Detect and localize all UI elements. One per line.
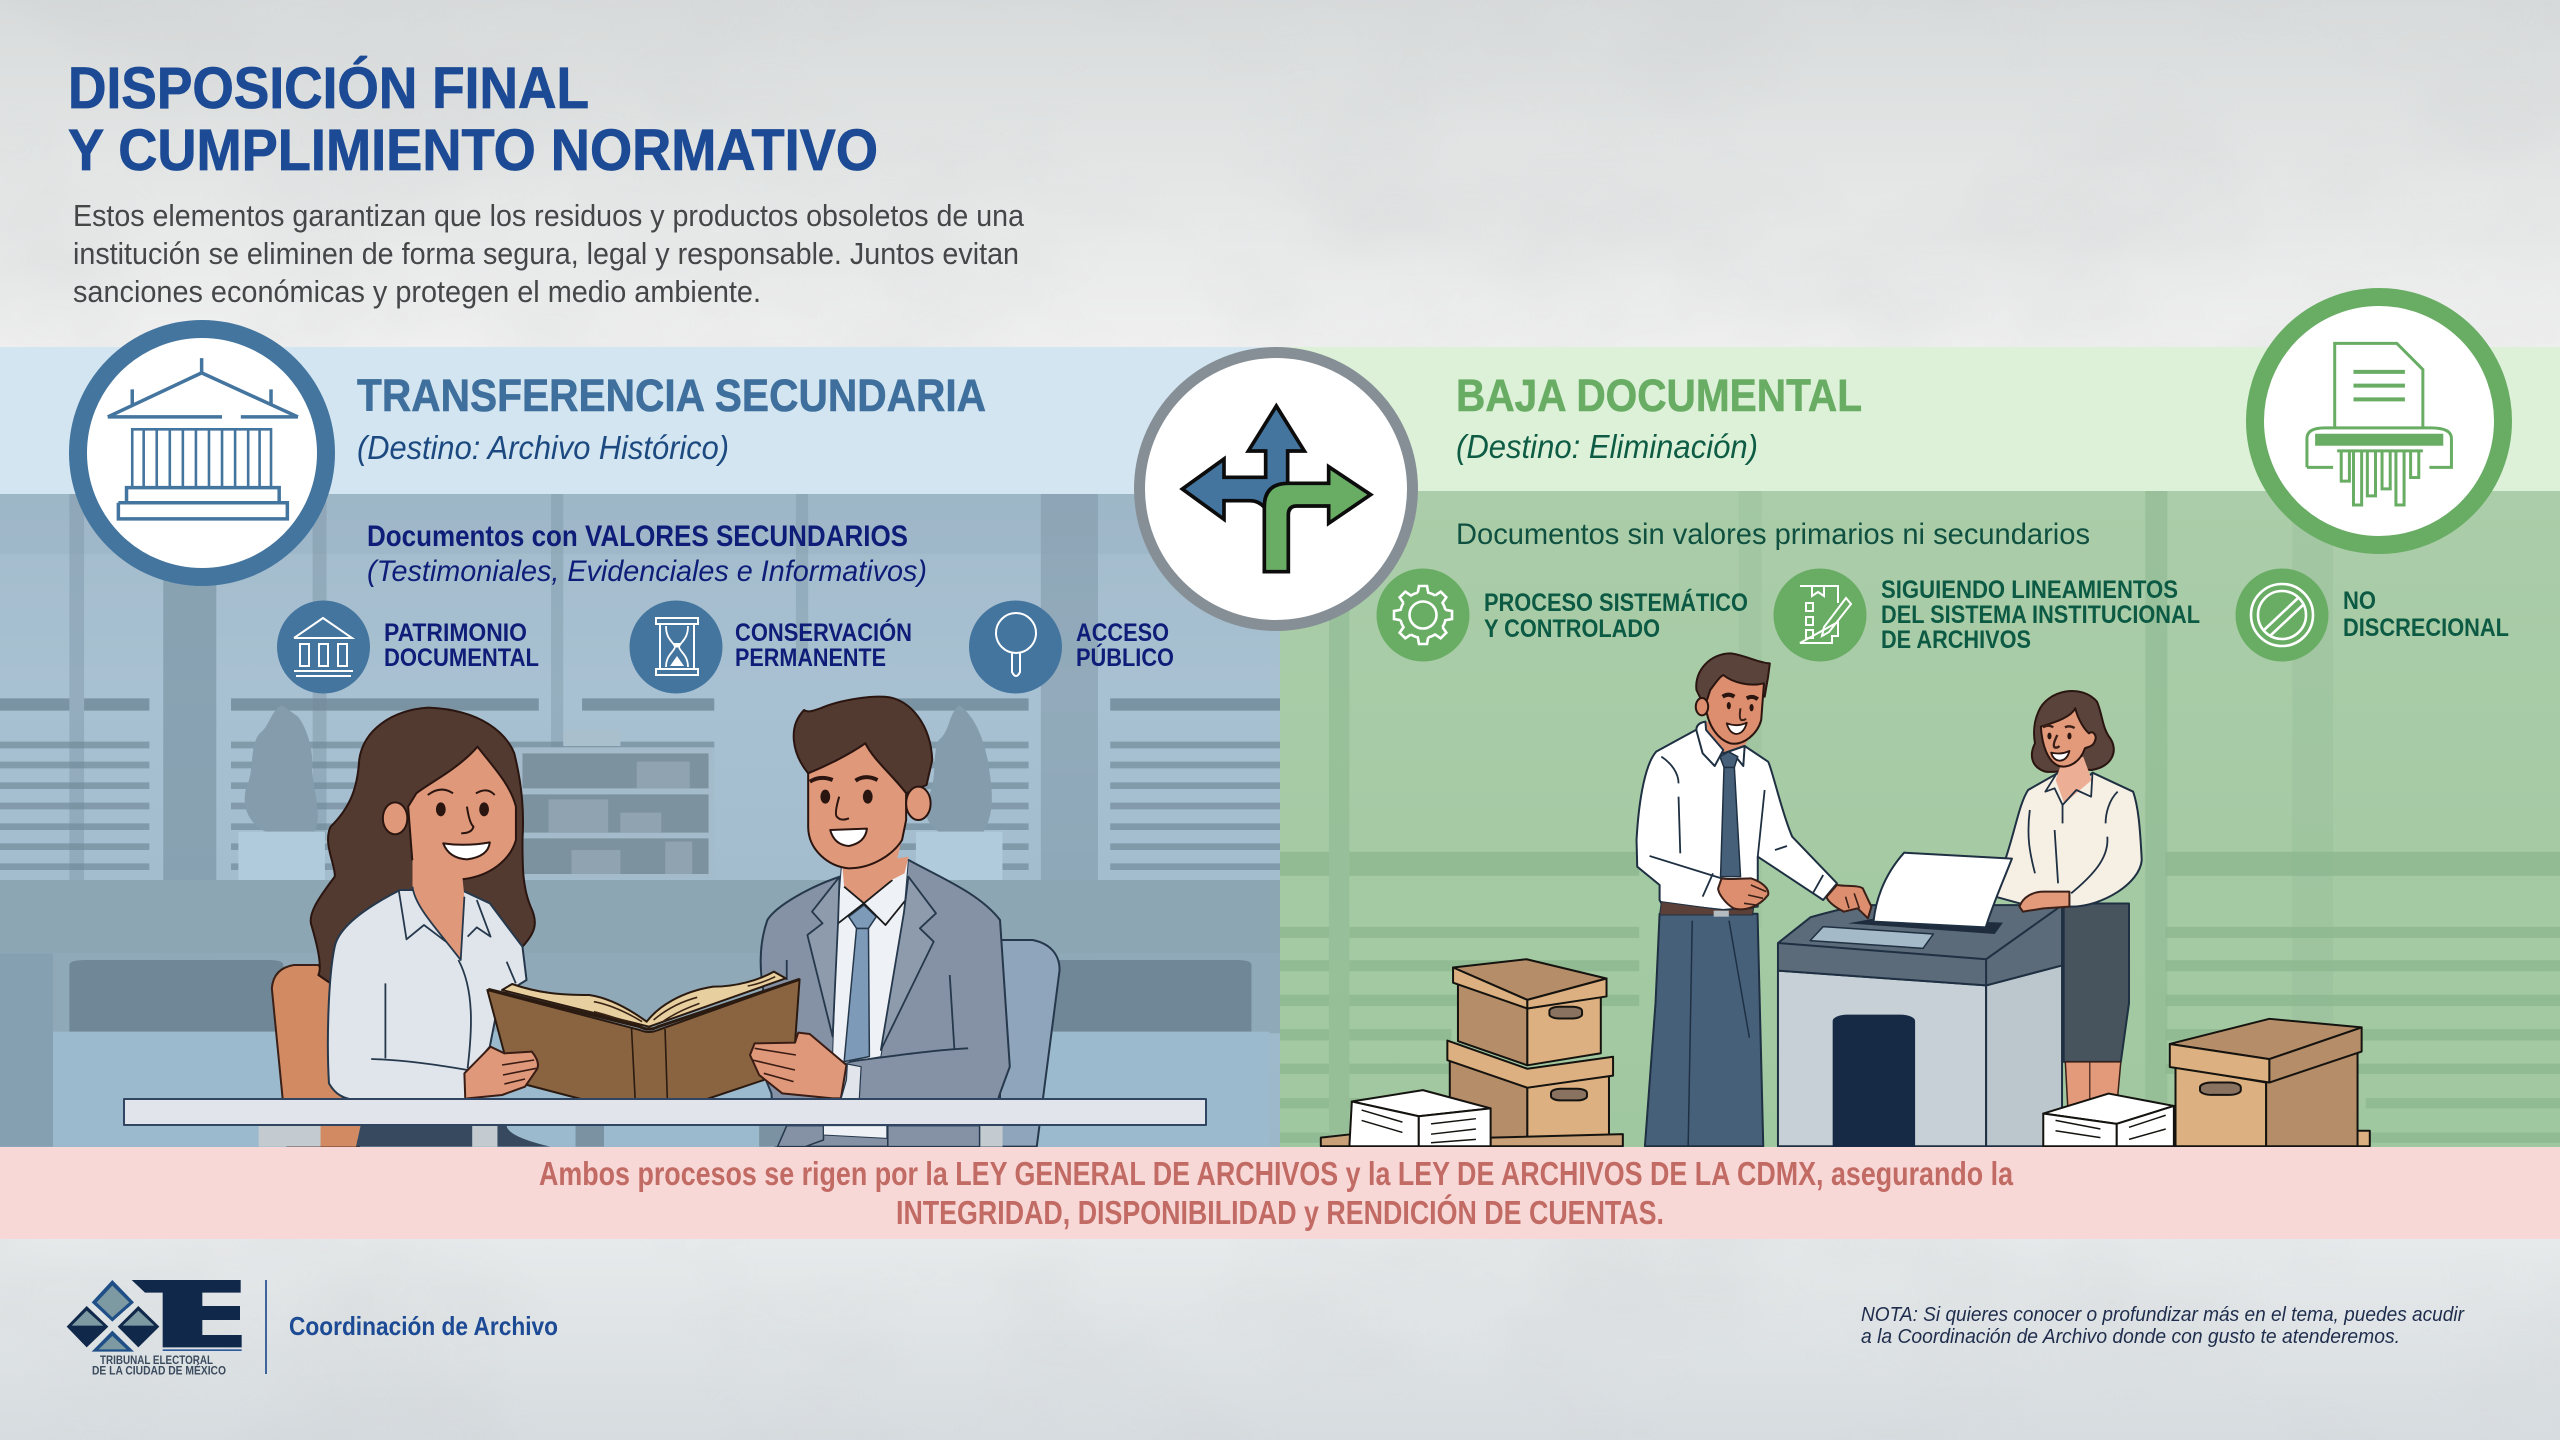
panel: baja documental scene (1280, 487, 2560, 1152)
people reading a book at a table (124, 697, 1206, 1147)
divider and department name: Coordinación de Archivo (289, 1311, 558, 1341)
icon item: lineamientos: SIGUIENDO LINEAMIENTOS (1881, 576, 2178, 604)
heading: baja documental: (Destino: Eliminación) (1456, 428, 1758, 465)
heading: transferencia secundaria: (Destino: Archivo Histórico) (357, 429, 729, 466)
icon item: lineamientos: DE ARCHIVOS (1881, 626, 2031, 654)
heading: transferencia secundaria: TRANSFERENCIA SECUNDARIA (357, 370, 986, 421)
icon item: no discrecional (2236, 568, 2509, 662)
intro paragraph: Estos elementos garantizan que los residuos y productos obsoletos de una (73, 198, 1025, 233)
icon item: no discrecional: DISCRECIONAL (2343, 614, 2509, 642)
woman skirt and legs (2064, 903, 2129, 1107)
icon item: patrimonio documental (277, 600, 539, 694)
icon: decision arrows badge (1140, 352, 1412, 626)
table and legs (259, 1126, 1003, 1147)
logo: Tribunal Electoral (67, 1280, 242, 1378)
heading: transferencia secundaria (357, 370, 986, 466)
icon item: proceso sistematico (1376, 568, 1748, 662)
heading: baja documental (1456, 370, 1862, 465)
band: legal note: Ambos procesos se rigen por la LEY GENERAL DE ARCHIVOS y la LEY DE ARCHIVOS DE LA CDMX, asegurando la (539, 1155, 2014, 1192)
icon item: patrimonio documental: PATRIMONIO (384, 619, 527, 647)
icon item: conservacion permanente: CONSERVACIÓN (735, 617, 912, 647)
text: valores secundarios (367, 520, 927, 588)
icon item: patrimonio documental: DOCUMENTAL (384, 644, 539, 672)
band: legal note: INTEGRIDAD, DISPONIBILIDAD y RENDICIÓN DE CUENTAS. (896, 1194, 1664, 1231)
title: Y CUMPLIMIENTO NORMATIVO (68, 118, 878, 183)
icon: large temple badge (78, 329, 326, 577)
icon item: acceso publico: PÚBLICO (1076, 642, 1174, 672)
icon item: lineamientos (1774, 568, 2200, 662)
icon item: acceso publico (969, 600, 1174, 694)
text: valores secundarios: Documentos con VALORES SECUNDARIOS (367, 520, 908, 553)
woman with long hair (272, 708, 535, 1147)
paper shredder (1778, 905, 2062, 1152)
icon: large shredder badge (2255, 297, 2503, 545)
logo: Tribunal Electoral: TRIBUNAL ELECTORAL (100, 1355, 213, 1367)
icon item: proceso sistematico: Y CONTROLADO (1484, 615, 1660, 643)
man trousers (1645, 914, 1763, 1146)
woman in cream blouse (1995, 691, 2142, 907)
intro paragraph: institución se eliminen de forma segura, legal y responsable. Juntos evitan (73, 236, 1019, 271)
man in grey suit (755, 697, 1060, 1147)
icon item: lineamientos: DEL SISTEMA INSTITUCIONAL (1881, 601, 2200, 629)
icon item: conservacion permanente (630, 600, 912, 694)
icon item: acceso publico: ACCESO (1076, 619, 1169, 647)
footnote: NOTA: Si quieres conocer o profundizar más en el tema, puedes acudir (1861, 1304, 2465, 1326)
title (68, 56, 878, 183)
icon item: conservacion permanente: PERMANENTE (735, 644, 886, 672)
text: valores secundarios: (Testimoniales, Evidenciales e Informativos) (367, 555, 927, 588)
intro paragraph: sanciones económicas y protegen el medio ambiente. (73, 274, 761, 309)
footnote: a la Coordinación de Archivo donde con gusto te atenderemos. (1861, 1326, 2400, 1348)
shredder slot, panel, sheet and woman's hand (1810, 853, 2069, 948)
heading: baja documental: BAJA DOCUMENTAL (1456, 370, 1862, 421)
icon item: no discrecional: NO (2343, 587, 2376, 615)
open book with hands (464, 972, 861, 1100)
intro paragraph (73, 198, 1025, 309)
band: transferencia header (0, 347, 1280, 494)
text: documentos sin valores: Documentos sin valores primarios ni secundarios (1456, 518, 2090, 551)
band: baja header (1280, 347, 2560, 491)
band: legal note (0, 1147, 2560, 1239)
man shirt, tie and jacket detail (787, 840, 968, 1063)
icon item: proceso sistematico: PROCESO SISTEMÁTICO (1484, 588, 1748, 617)
footnote (1861, 1304, 2465, 1348)
panel: transferencia secundaria scene (0, 494, 1280, 1147)
office background left (0, 494, 1280, 1147)
logo: Tribunal Electoral: DE LA CIUDAD DE MÉXICO (92, 1364, 226, 1378)
title: DISPOSICIÓN FINAL (68, 56, 589, 121)
man face (808, 743, 931, 893)
man in white shirt (1637, 653, 1871, 918)
office background right (1280, 487, 2560, 1146)
woman neck and blouse detail (371, 860, 516, 1070)
cardboard boxes and paper stacks (1321, 959, 2370, 1146)
